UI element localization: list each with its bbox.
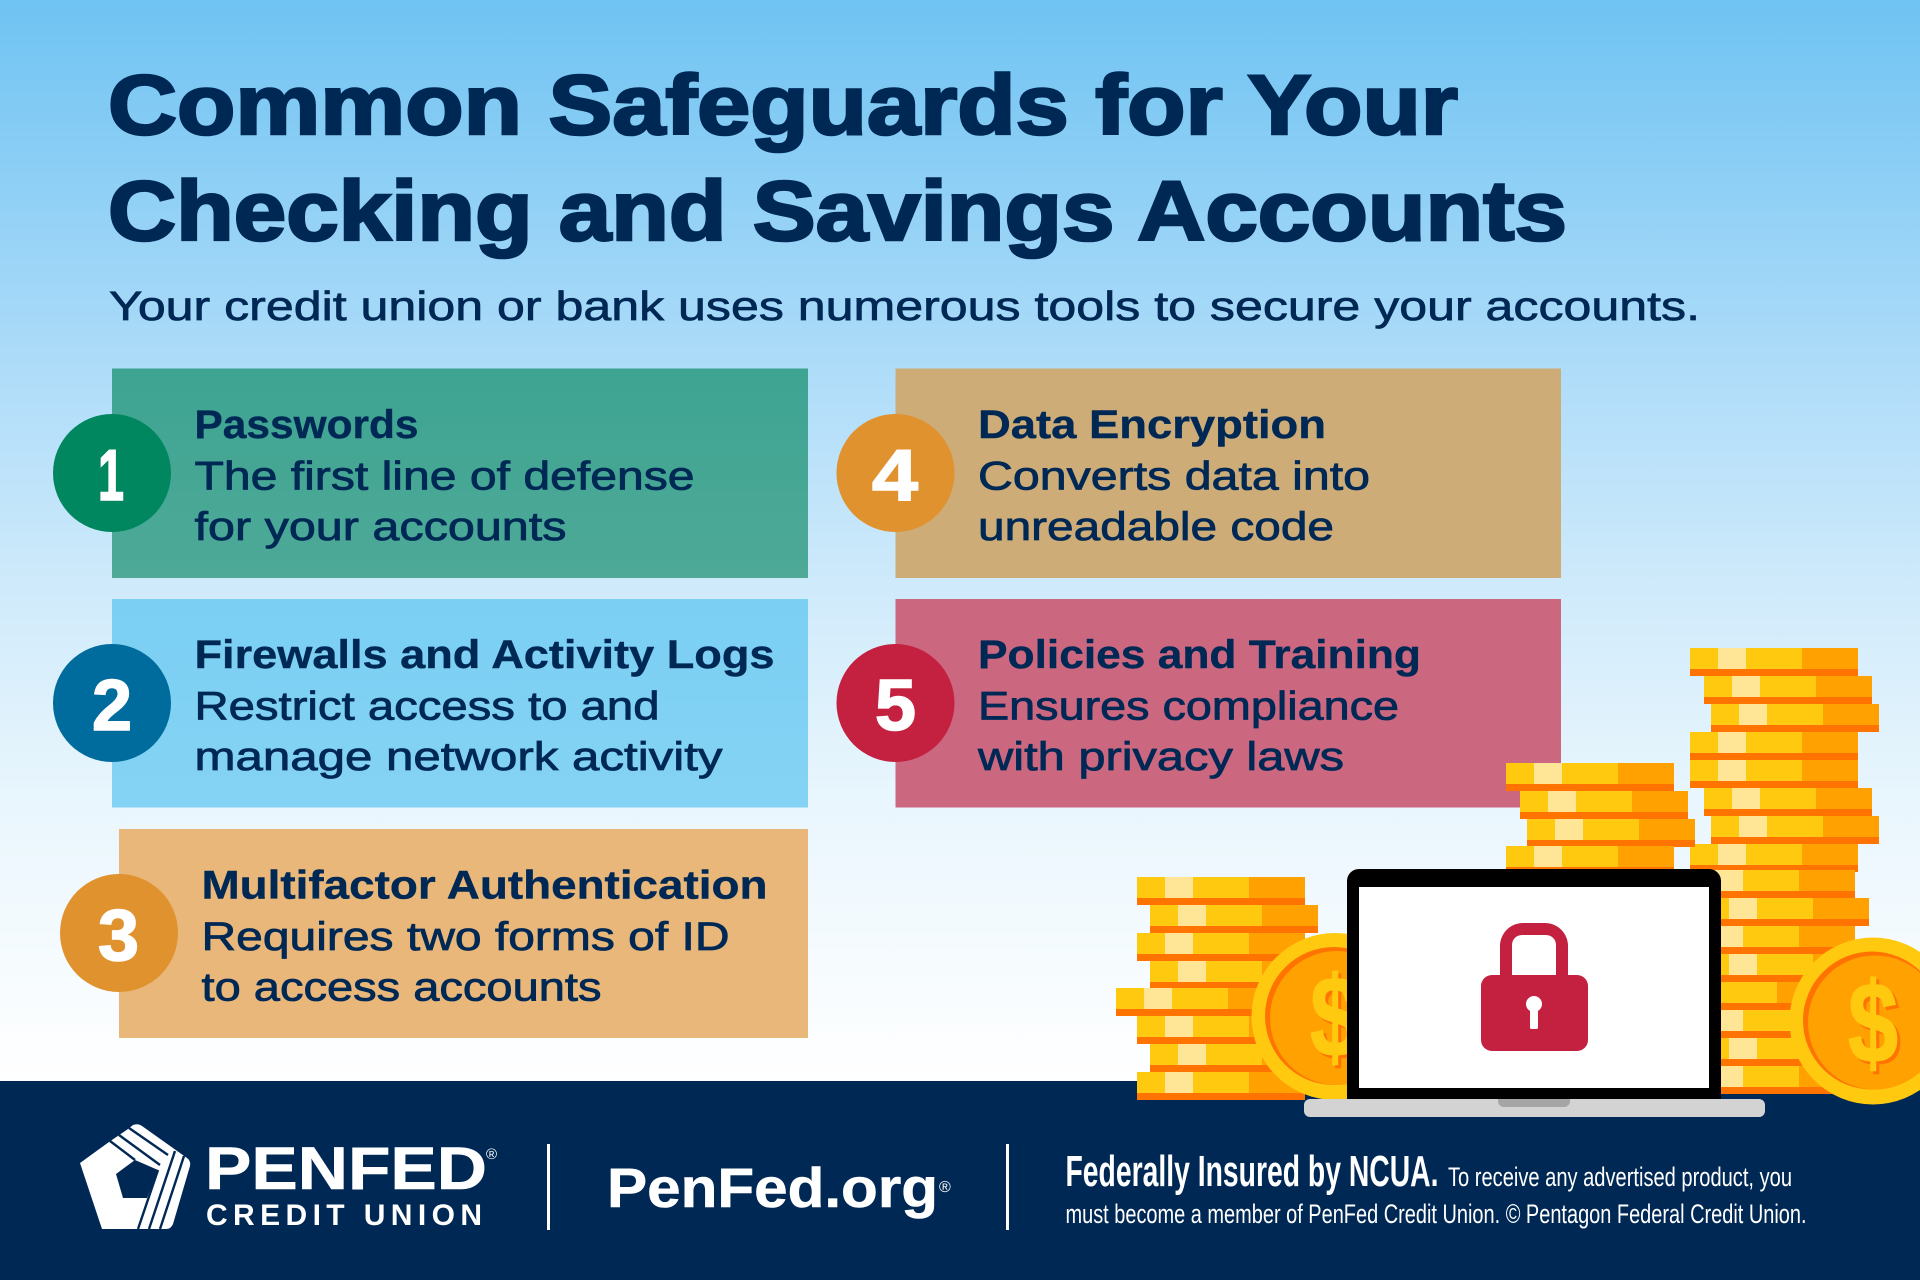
coin: left: $ xyxy=(1313,957,1363,1084)
text: policies: Policies and Training xyxy=(978,633,1421,677)
logo wordmark: PENFED xyxy=(205,1135,487,1202)
text: policies xyxy=(977,633,1421,779)
text: encryption: Data Encryption xyxy=(978,403,1326,447)
text: multifactor xyxy=(202,864,768,1010)
registered mark: ® xyxy=(486,1146,497,1163)
text: multifactor: Requires two forms of ID xyxy=(202,915,730,959)
icon: padlock xyxy=(1481,923,1588,1051)
divider xyxy=(1006,1144,1009,1230)
panel: multifactor xyxy=(60,829,808,1038)
coin stack: middle xyxy=(1506,763,1695,874)
number 1: 1 xyxy=(98,436,124,516)
text: firewalls: manage network activity xyxy=(194,735,722,779)
title: Checking and Savings Accounts xyxy=(108,164,1567,258)
coin stack: left xyxy=(1116,877,1318,1100)
coin: left: $ xyxy=(1310,954,1360,1081)
number 5: 5 xyxy=(875,666,916,746)
badge 4 xyxy=(836,414,954,532)
subtitle: Your credit union or bank uses numerous tools to secure your accounts. xyxy=(109,283,1700,329)
text: policies: with privacy laws xyxy=(977,735,1344,779)
text: firewalls: Firewalls and Activity Logs xyxy=(194,633,774,677)
divider xyxy=(547,1144,550,1230)
panel: passwords xyxy=(53,368,808,578)
text: passwords: for your accounts xyxy=(194,505,566,549)
website: PenFed.org xyxy=(607,1156,938,1219)
badge 5 xyxy=(836,644,954,762)
text: multifactor: Multifactor Authentication xyxy=(202,864,768,908)
coin: right: $ xyxy=(1848,960,1898,1087)
badge 1 xyxy=(53,414,171,532)
laptop xyxy=(1304,869,1765,1117)
disclosure text: Federally Insured by NCUA. xyxy=(1066,1147,1438,1196)
text: encryption: Converts data into xyxy=(978,454,1370,498)
title: Common Safeguards for Your xyxy=(108,58,1458,152)
number 4: 4 xyxy=(872,436,918,516)
text: multifactor: to access accounts xyxy=(202,966,602,1010)
title xyxy=(108,58,1567,258)
website: ® xyxy=(939,1179,951,1196)
panel: encryption xyxy=(836,368,1561,578)
coin stack: right xyxy=(1665,648,1879,1094)
text: firewalls xyxy=(194,633,774,779)
logo: PenFed xyxy=(80,1124,497,1232)
disclosure text xyxy=(1066,1147,1806,1229)
icon: pentagon mark xyxy=(80,1124,190,1229)
coin: right xyxy=(1790,938,1920,1104)
text: passwords: The first line of defense xyxy=(194,454,694,498)
number 2: 2 xyxy=(92,666,132,746)
text: encryption: unreadable code xyxy=(978,505,1334,549)
text: encryption xyxy=(978,403,1370,549)
footer band xyxy=(0,1081,1920,1280)
text: passwords xyxy=(194,403,694,549)
number 3: 3 xyxy=(98,896,139,976)
coin: left xyxy=(1252,933,1418,1100)
badge 3 xyxy=(60,874,178,992)
disclosure text: To receive any advertised product, you xyxy=(1448,1162,1792,1192)
panel: policies xyxy=(836,599,1561,808)
panel: firewalls xyxy=(53,599,808,808)
text: passwords: Passwords xyxy=(194,403,418,447)
coin: right: $ xyxy=(1851,963,1901,1090)
logo subtitle: CREDIT UNION xyxy=(206,1199,482,1232)
badge 2 xyxy=(53,644,171,762)
text: firewalls: Restrict access to and xyxy=(194,684,660,728)
text: policies: Ensures compliance xyxy=(978,684,1399,728)
